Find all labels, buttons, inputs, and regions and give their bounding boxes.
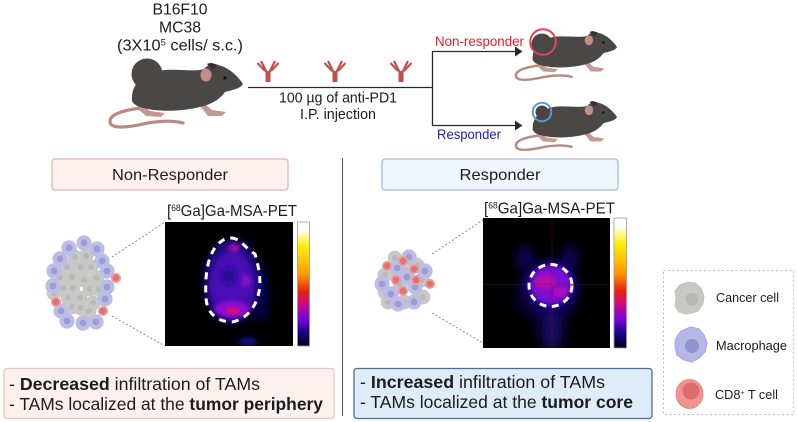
summary: non-responder xyxy=(4,368,334,418)
responder label: Responder xyxy=(437,126,501,142)
cell line label: cells/ s.c.) xyxy=(166,38,243,54)
PET title: non-responder: Ga]Ga-MSA-PET xyxy=(181,203,297,220)
icon: antibody 1 xyxy=(258,61,278,82)
legend label: CD8 T cell: + xyxy=(740,390,745,397)
PET title: responder: Ga]Ga-MSA-PET xyxy=(498,200,615,218)
icon: responder mouse xyxy=(516,101,617,150)
heading: responder: Responder xyxy=(460,167,541,184)
summary: responder: - TAMs localized at the tumor core xyxy=(360,392,633,412)
PET title: non-responder: 68 xyxy=(171,203,181,213)
heading: non-responder xyxy=(52,159,288,190)
color bar: non-responder xyxy=(298,222,310,346)
heading: responder xyxy=(382,159,618,190)
legend label: CD8 T cell: T cell xyxy=(745,388,778,402)
icon: antibody 3 xyxy=(390,61,412,82)
PET title: responder: [ xyxy=(484,200,488,218)
legend panel xyxy=(664,270,794,414)
injection label xyxy=(279,90,397,123)
legend label: cancer cell: Cancer cell xyxy=(716,291,779,305)
legend label: macrophage: Macrophage xyxy=(716,339,787,353)
injection label: I.P. injection xyxy=(300,107,376,123)
summary: non-responder: - TAMs localized at the tumor periphery xyxy=(9,394,323,414)
PET image: responder xyxy=(483,218,610,352)
color bar: responder xyxy=(614,218,626,348)
injection label: 100 µg of anti-PD1 xyxy=(279,90,397,106)
zoom guide lines: responder xyxy=(432,220,483,343)
center divider xyxy=(342,158,344,416)
cell line label: B16F10 xyxy=(152,2,208,18)
PET title: non-responder: [ xyxy=(167,203,171,220)
cell line label: 5 xyxy=(161,38,166,48)
PET title: responder: 68 xyxy=(488,200,498,210)
icon: mouse with tumor xyxy=(110,58,243,127)
zoom guide lines: non-responder xyxy=(112,222,165,346)
summary: responder: - Increased infiltration of TAMs xyxy=(360,372,605,392)
tumor illustration: non-responder xyxy=(45,235,121,331)
icon: cancer cell xyxy=(675,282,704,314)
icon: non-responder mouse xyxy=(516,29,617,80)
cell line label: MC38 xyxy=(159,20,201,36)
legend label: CD8 T cell: CD8 xyxy=(715,388,740,402)
heading: non-responder: Non-Responder xyxy=(112,167,229,184)
non-responder label: Non-responder xyxy=(435,33,524,49)
summary: non-responder: - Decreased infiltration of TAMs xyxy=(9,374,260,394)
tumor illustration: responder xyxy=(374,249,435,312)
summary: responder xyxy=(354,368,652,418)
cell line label: (3X10 xyxy=(117,38,158,54)
icon: antibody 2 xyxy=(324,61,346,82)
cell line label xyxy=(117,2,243,54)
branching arrow xyxy=(248,46,522,130)
icon: macrophage xyxy=(675,327,707,362)
PET image: non-responder xyxy=(165,222,293,347)
icon: CD8 T cell xyxy=(676,380,703,408)
